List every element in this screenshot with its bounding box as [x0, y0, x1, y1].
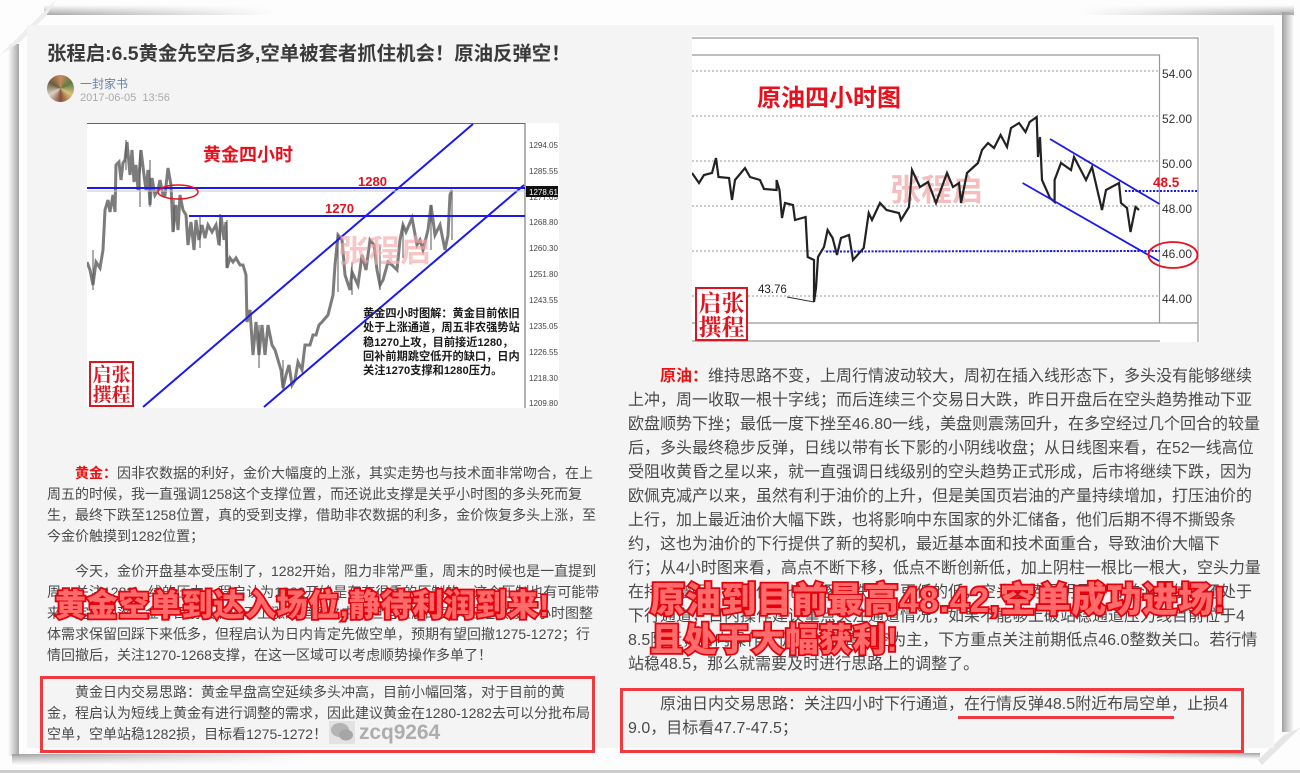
axis labels: 50.00 [1162, 157, 1192, 171]
axis labels: 1243.55 [529, 296, 558, 305]
axis labels: 54.00 [1162, 67, 1192, 81]
text block: gold analysis: 生，最终下跌至1258位置，真的受到支撑，借助非农数据的利多，金价恢复多头上涨，至 [47, 507, 596, 523]
dotted levels [826, 191, 1197, 252]
text block: oil analysis: 行；从4小时图来看，高点不断下移，低点不断创新低，加上阴柱一根比一根大，空头力量 [628, 560, 1261, 577]
text block: oil analysis: 欧盘顺势下挫；最低一度下挫至46.80一线，美盘则震荡回升，在多空经过几个回合的较量 [628, 416, 1260, 433]
chart note: 回补前期跳空低开的缺口，日内 [363, 349, 520, 363]
text block: gold analysis: 情回撤后，关注1270-1268支撑，在这一区域可以考虑顺势操作多单了！ [47, 647, 492, 663]
text block: oil analysis: 上冲，周一收取一根十字线；而后连续三个交易日大跌，昨日开盘后在空头趋势推动下亚 [628, 392, 1252, 409]
axis labels: 1226.55 [529, 348, 558, 357]
support and resistance lines [87, 124, 525, 407]
channel lines [1023, 139, 1160, 261]
callout: oil intraday plan: 原油日内交易思路：关注四小时下行通道，在行情反弹48.5附近布局空单，止损4 [660, 696, 1228, 713]
stamp: gold chart seal: 启张 [92, 360, 130, 387]
chart: gold four-hour: 1278.61 [529, 188, 558, 197]
callout: oil intraday plan [620, 688, 1244, 753]
text block: oil analysis: 在持续增强，前期低点也被逐步跌破，更低的低，空头趋势很明显，目前油价依旧还处于 [628, 584, 1252, 601]
publish date: 2017-06-05 13:56 [80, 92, 170, 104]
stamp: gold chart seal: 撰程 [92, 380, 130, 407]
red circle [158, 185, 198, 199]
stamp: oil chart seal [695, 287, 748, 341]
price line [87, 142, 452, 388]
text block: gold analysis: 今金价触摸到1282位置； [47, 528, 204, 544]
text block: oil analysis: 站稳48.5，那么就需要及时进行思路上的调整了。 [628, 656, 979, 673]
candle wicks [93, 140, 452, 390]
red underline [958, 716, 1174, 719]
axis labels: 1268.80 [529, 218, 558, 227]
text block: oil analysis: 欧佩克减产以来，虽然有利于油价的上升，但是美国页岩油的产量持续增加，打压油价的 [628, 488, 1252, 505]
axis labels: 1260.30 [529, 244, 558, 253]
text block: gold analysis: 体需求保留回踩下来低多，但程启认为日内肯定先做空单，预期有望回撤1275-1272；行 [47, 626, 590, 642]
icon: author avatar [47, 75, 74, 102]
chart: gold four-hour: 1270 [325, 201, 354, 216]
axis labels: 1285.55 [529, 167, 558, 176]
axis labels: 1209.80 [529, 399, 558, 408]
chart: crude oil four-hour [692, 36, 1200, 342]
text block: gold analysis: 来一定的回落，金价目前虽然处于上涨的趋势之中，但是上涨的势头已经放缓，小时图整 [47, 605, 593, 621]
text block: gold analysis: 周一关注1282一线的压力，程启认为1282开始是存在很重的压制的，这个压制也有可能带 [47, 584, 599, 600]
callout: gold intraday plan: 空单，空单站稳1282损，目标看1275-1272！ [47, 726, 327, 742]
level labels: 1280 [358, 174, 387, 189]
callout: gold intraday plan [40, 676, 595, 753]
stamp: oil chart seal: 撰程 [698, 309, 744, 342]
axis labels: 1218.30 [529, 374, 558, 383]
chart: gold four-hour [87, 123, 559, 408]
chart note: 黄金四小时图解：黄金目前依旧 [363, 306, 520, 320]
low label: 43.76 [758, 284, 787, 296]
text block: oil analysis: 下行通道，日内操作建议重点关注通道情况，如果不能够上破站稳通道压力线目前位于4 [628, 608, 1245, 625]
watermark: 张程启 [338, 234, 431, 269]
callout: gold intraday plan: 黄金日内交易思路：黄金早盘高空延续多头冲高，目前小幅回落，对于目前的黄 [75, 684, 565, 700]
axis labels [1162, 67, 1192, 306]
text block: gold analysis: 今天，金价开盘基本受压制了，1282开始，阻力非常严重，周末的时候也是一直提到 [75, 563, 596, 579]
chart note: 稳1270上攻，目前接近1280， [363, 335, 513, 349]
chart title: 原油四小时图 [757, 85, 901, 112]
axis labels: 1294.05 [529, 141, 558, 150]
axis labels [529, 141, 558, 408]
icon: wechat watermark [329, 721, 355, 744]
text block: oil analysis: 约，这也为油价的下行提供了新的契机，最近基本面和技术面重合，导致油价大幅下 [628, 536, 1220, 553]
axis labels: 1277.05 [529, 193, 558, 202]
chart note: 处于上涨通道，周五非农强势站 [363, 320, 520, 334]
callout: oil intraday plan: 9.0，目标看47.7-47.5； [628, 720, 798, 737]
stamp: oil chart seal: 启张 [698, 285, 744, 318]
axis labels: 48.00 [1162, 202, 1192, 216]
text block: gold analysis [47, 465, 599, 663]
red circle around 46.00 [1148, 242, 1198, 268]
text block: oil analysis: 上行，加上最近油价大幅下跌，也将影响中东国家的外汇储备，他们后期不得不撕毁条 [628, 512, 1236, 529]
axis labels: 44.00 [1162, 292, 1192, 306]
text block: oil analysis: 受阻收黄昏之星以来，就一直强调日线级别的空头趋势正式形成，后市将继续下跌，因为 [628, 464, 1252, 481]
watermark: 张程启 [890, 173, 983, 208]
overlay headline: oil second line: 且处于大幅获利! [650, 621, 898, 658]
axis labels: 46.00 [1162, 247, 1192, 261]
48.5 label: 48.5 [1153, 175, 1180, 190]
price line [692, 117, 1139, 302]
text block: oil analysis: 原油：维持思路不变，上周行情波动较大，周初在插入线形态下，多头没有能够继续 [660, 368, 1252, 385]
text block: oil analysis: 后，多头最终稳步反弹，日线以带有长下影的小阴线收盘；从日线图来看，在52一线高位 [628, 440, 1254, 457]
chart title: 黄金四小时 [203, 144, 293, 165]
stamp: gold chart seal [89, 361, 134, 407]
chart note: 关注1270支撑和1280压力。 [363, 363, 502, 377]
overlay headline: gold: 黄金空单到达入场位,静待利润到来! [55, 588, 550, 623]
wechat id: zcq9264 [359, 721, 440, 744]
callout: gold intraday plan: 金，程启认为短线上黄金有进行调整的需求，因此建议黄金在1280-1282去可以分批布局 [47, 705, 590, 721]
text block: gold analysis: 周五的时候，我一直强调1258这个支撑位置，而还说此支撑是关乎小时图的多头死而复 [47, 486, 582, 502]
axis labels: 1251.80 [529, 270, 558, 279]
text block: oil analysis: 8.5附近，日内操作上仍然以逢高做空为主，下方重点关注前期低点46.0整数关口。若行情 [628, 632, 1257, 649]
text block: oil analysis [628, 367, 1261, 673]
title: 张程启:6.5黄金先空后多,空单被套者抓住机会！原油反弹空！ [47, 43, 571, 65]
price tag [526, 186, 558, 197]
chart note [363, 306, 520, 377]
text block: gold analysis: 黄金：因非农数据的利好，金价大幅度的上涨，其实走势也与技术面非常吻合，在上 [75, 465, 593, 481]
axis labels: 52.00 [1162, 112, 1192, 126]
overlay headline: oil: 原油到目前最高48.42,空单成功进场! [650, 581, 1226, 620]
axis labels: 1235.05 [529, 322, 558, 331]
author name: 一封家书 [80, 77, 128, 91]
